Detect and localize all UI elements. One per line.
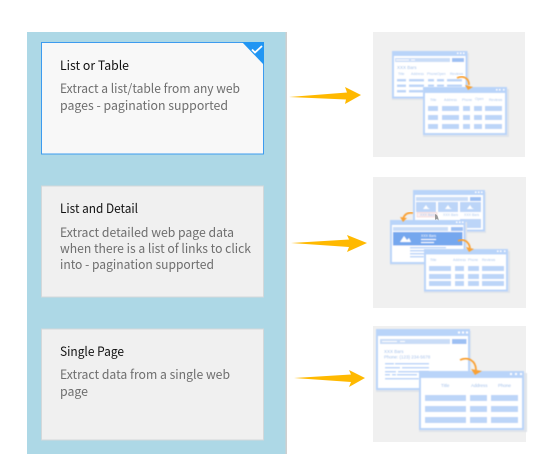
description: List or Table xyxy=(60,78,240,114)
browser window: list page: Phone xyxy=(427,72,437,76)
browser window: extracted table: Reviews xyxy=(489,98,502,102)
heading: List or Table: List or Table xyxy=(60,55,129,74)
browser window: extracted table: Phone xyxy=(468,258,478,262)
browser window: extracted table: Title xyxy=(430,98,437,102)
illustration: list and detail xyxy=(373,177,526,308)
icon: orange curved arrow to detail xyxy=(400,213,413,222)
description: List or Table: pages - pagination supported xyxy=(60,95,228,114)
card: Single Page xyxy=(42,329,264,440)
card: List and Detail xyxy=(42,186,264,297)
browser window: extracted table: Phone xyxy=(498,383,512,388)
browser window: extracted table: Address xyxy=(453,258,466,262)
browser window: list page: XXX Bars xyxy=(397,65,417,70)
browser window: extracted table xyxy=(419,371,527,432)
browser window: extracted table xyxy=(424,249,510,293)
card: List or Table xyxy=(42,42,264,154)
browser window: extracted table: Title xyxy=(441,383,450,388)
browser window: list of links: XXX Bars xyxy=(420,213,435,217)
browser window: list page: Reviews xyxy=(450,72,463,76)
description: List and Detail xyxy=(60,222,251,273)
icon: selected check corner xyxy=(242,42,264,65)
icon: orange curved arrow xyxy=(460,359,482,375)
heading: Single Page: Single Page xyxy=(60,341,124,360)
browser window: single page: XXX Bars xyxy=(384,349,404,354)
browser window: extracted table xyxy=(423,87,509,137)
description: List and Detail: into - pagination supported xyxy=(60,254,214,273)
browser window: list page: Address xyxy=(411,72,424,76)
description: Single Page xyxy=(60,364,230,400)
browser window: single page xyxy=(376,329,471,392)
description: List and Detail: Extract detailed web page data xyxy=(60,222,234,241)
browser window: extracted table: Title xyxy=(430,258,437,262)
arrow: card 1 to image 1 xyxy=(289,87,361,104)
browser window: detail page: XXX Bars xyxy=(421,234,436,238)
browser window: extracted table: Address xyxy=(444,98,457,102)
browser window: list page: Open xyxy=(437,72,446,76)
browser window: list of links xyxy=(413,190,486,233)
icon: orange curved arrow to table xyxy=(458,240,474,252)
browser window: list page xyxy=(392,51,469,100)
description: Single Page: page xyxy=(60,381,88,400)
browser window: single page: Phone: (123) 234-5678 xyxy=(384,354,431,360)
panel: mode selection column xyxy=(27,32,287,454)
illustration: list or table xyxy=(373,32,525,157)
browser window: list of links: XXX Bars xyxy=(443,213,458,217)
arrow: card 2 to image 2 xyxy=(291,235,367,252)
arrow: card 3 to image 3 xyxy=(294,370,365,387)
browser window: extracted table: Reviews xyxy=(482,258,495,262)
browser window: detail page xyxy=(390,220,467,265)
description: List or Table: Extract a list/table from any web xyxy=(60,78,240,97)
icon: cursor xyxy=(435,214,439,221)
browser window: extracted table: Address xyxy=(471,383,488,388)
browser window: list page: Title xyxy=(398,72,405,76)
illustration: single page xyxy=(373,326,527,442)
icon: orange curved arrow xyxy=(457,77,473,90)
heading: List and Detail: List and Detail xyxy=(60,198,138,217)
browser window: list of links: XXX Bars xyxy=(464,213,479,217)
description: List and Detail: when there is a list of links to click xyxy=(60,238,251,257)
description: Single Page: Extract data from a single web xyxy=(60,364,230,383)
browser window: extracted table: Phone xyxy=(462,98,472,102)
browser window: extracted table: Open xyxy=(475,97,484,101)
